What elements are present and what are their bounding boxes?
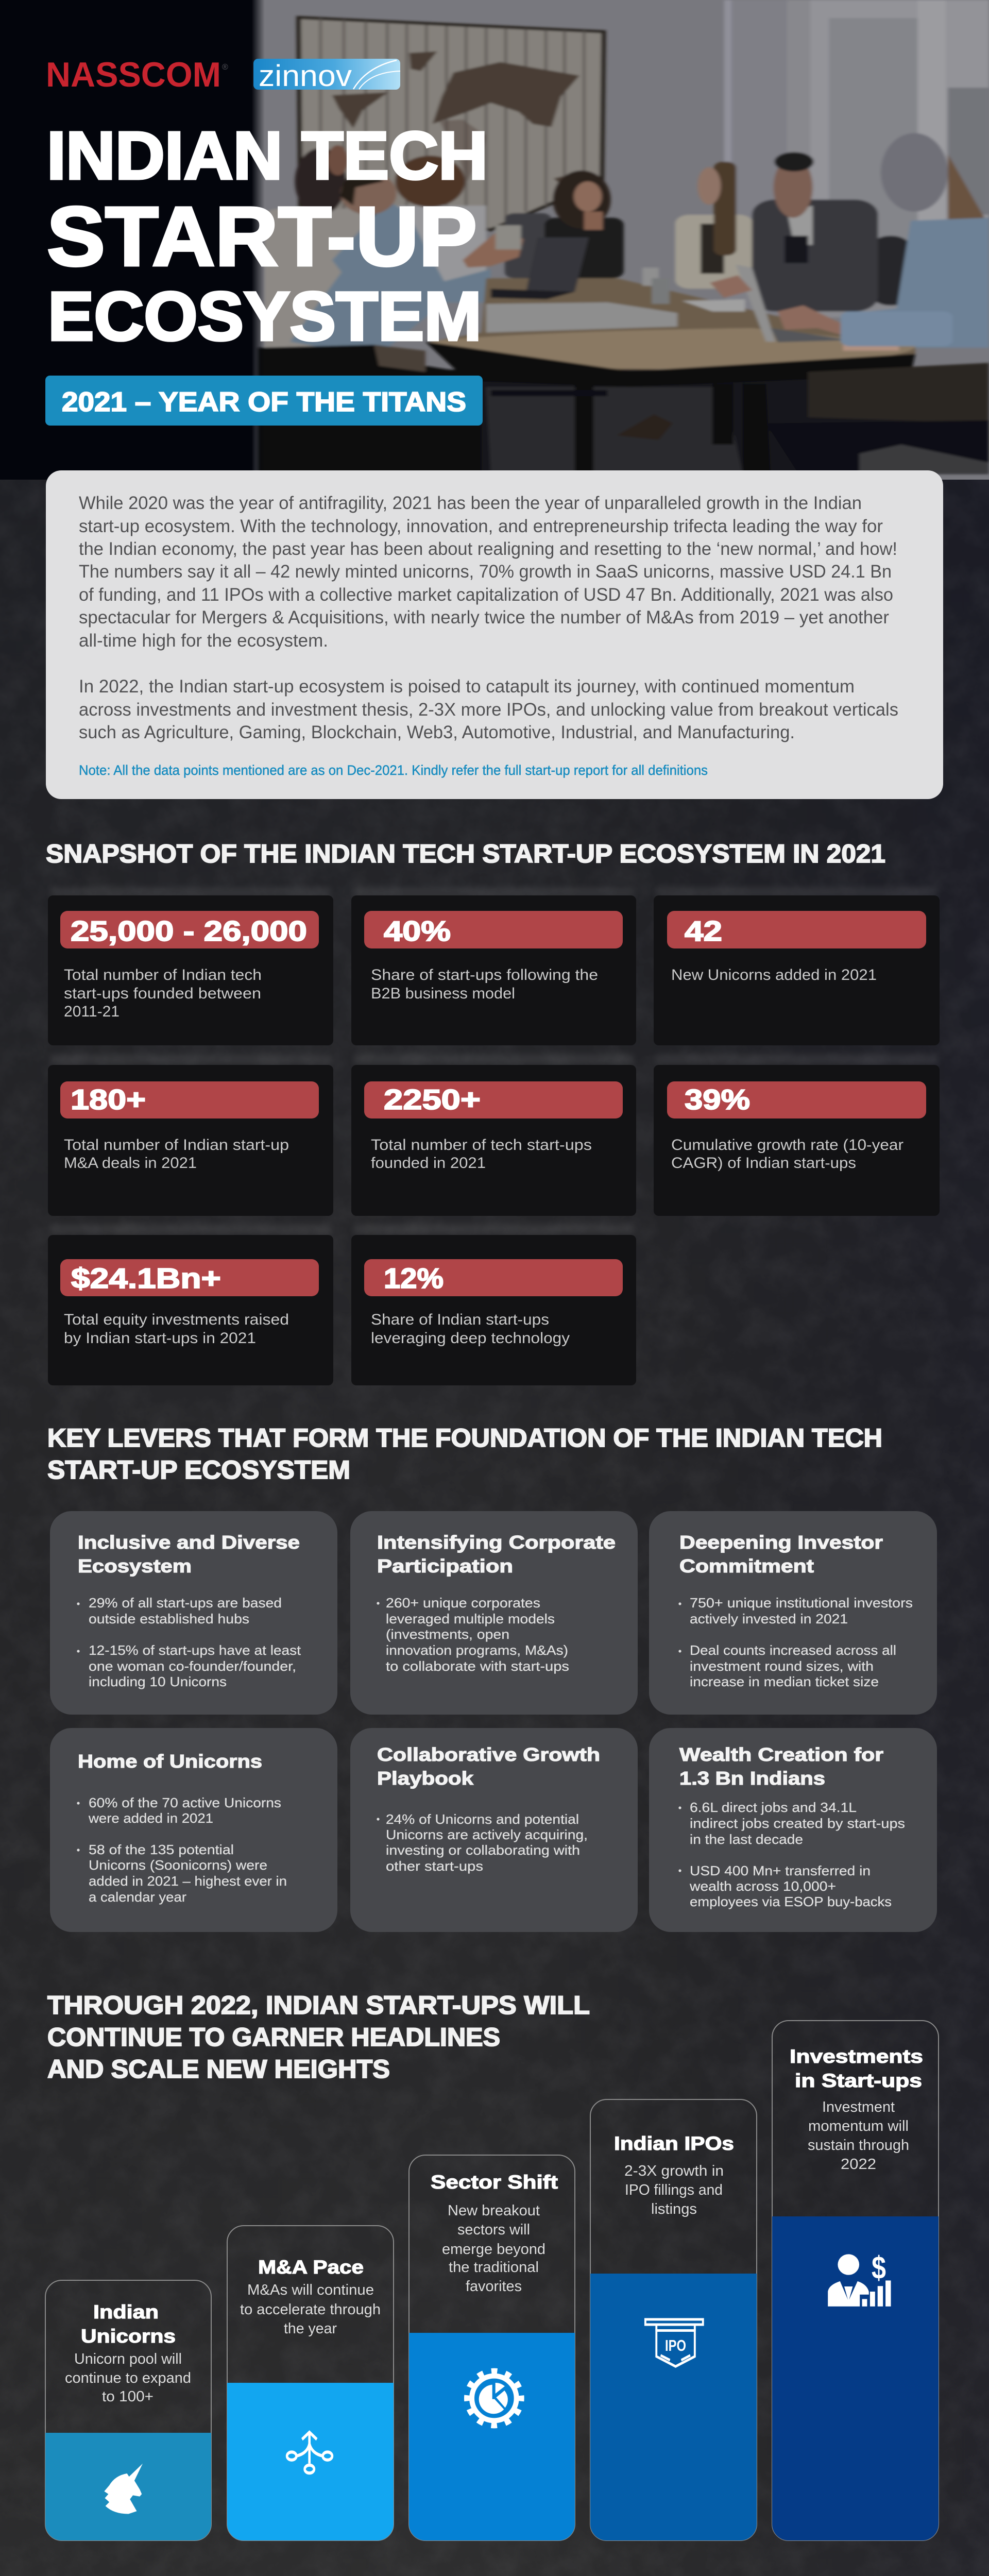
step text: emerge beyond [442,2241,545,2258]
lever bullets: Unicorns are actively acquiring, [386,1827,588,1842]
step text: favorites [466,2278,522,2295]
lever bullets: 12-15% of start-ups have at least [89,1642,301,1658]
step title: Indian IPOs [614,2133,734,2154]
lever bullets: wealth across 10,000+ [689,1878,836,1894]
lever bullets: 260+ unique corporates [386,1595,540,1611]
intro paragraph 1: spectacular for Mergers & Acquisitions, with nearly twice the number of M&As from 2019 – yet another [79,607,889,628]
lever card: Wealth Creation for 1.3 Bn Indians [649,1728,937,1932]
stat card: $24.1Bn+ [48,1235,333,1385]
step text: sectors will [457,2222,530,2238]
title: START-UP [47,189,477,283]
stat card: 12%: leveraging deep technology [371,1330,570,1347]
stat card: 25,000 - 26,000: Total number of Indian tech [64,967,262,984]
lever bullets: including 10 Unicorns [89,1674,227,1689]
heading: key levers: START-UP ECOSYSTEM [47,1455,350,1484]
lever title: Intensifying Corporate [377,1532,616,1553]
stat card: 2250+: founded in 2021 [371,1155,486,1172]
lever bullets [679,1800,905,1909]
heading: key levers [47,1423,882,1484]
icon: gear with pie chart [468,2371,521,2425]
hero photo: meeting room [0,0,989,480]
lever bullets [377,1595,569,1674]
step text: sustain through [808,2137,909,2154]
lever bullets: actively invested in 2021 [690,1611,848,1626]
lever bullets: Unicorns (Soonicorns) were [89,1857,267,1873]
step text: Investment [822,2099,895,2115]
step text: to accelerate through [240,2301,381,2318]
intro paragraph 1: all-time high for the ecosystem. [79,631,328,651]
stat card: $24.1Bn+: Total equity investments raised [64,1311,289,1328]
subtitle badge: 2021 – YEAR OF THE TITANS [62,387,466,417]
stat card: 25,000 - 26,000: start-ups founded between [64,985,261,1002]
step text [808,2099,909,2173]
title: ECOSYSTEM [48,278,482,355]
lever bullets: a calendar year [89,1889,186,1905]
lever bullets [377,1811,588,1874]
lever bullets [77,1795,287,1905]
lever card: Deepening Investor Commitment [649,1511,937,1715]
step text: IPO fillings and [625,2182,723,2198]
stat card: 25,000 - 26,000: 2011-21 [64,1003,120,1020]
stat card: $24.1Bn+: $24.1Bn+ [71,1262,221,1294]
step text [624,2163,724,2217]
intro paragraph 1 [79,493,897,651]
lever bullets: 24% of Unicorns and potential [386,1811,579,1827]
lever title: Playbook [377,1768,474,1789]
lever title [377,1744,600,1789]
intro paragraph 1: The numbers say it all – 42 newly minted unicorns, 70% growth in SaaS unicorns, massive USD 24.1 Bn [79,562,892,582]
icon: investor with chart: $ [872,2250,886,2286]
step title: M&A Pace [258,2257,364,2278]
stat card: 25,000 - 26,000 [48,895,333,1045]
logo: NASSCOM: ® [222,63,228,72]
step text: momentum will [808,2118,909,2134]
intro paragraph 1: the Indian economy, the past year has been about realigning and resetting to the ‘new normal,’ and how! [79,539,897,559]
stat card: $24.1Bn+: by Indian start-ups in 2021 [64,1330,256,1347]
step text [442,2202,545,2295]
heading: through 2022: AND SCALE NEW HEIGHTS [47,2055,390,2083]
step text: M&As will continue [247,2282,374,2298]
step title: in Start-ups [795,2070,922,2091]
stat card: 25,000 - 26,000: 25,000 - 26,000 [71,915,307,947]
step title: Unicorns [81,2326,176,2347]
step text: listings [651,2201,697,2217]
lever bullets: employees via ESOP buy-backs [690,1894,892,1909]
lever bullets: innovation programs, M&As) [386,1642,568,1658]
lever bullets: investing or collaborating with [386,1842,580,1858]
logo: NASSCOM: NASSCOM [46,55,221,94]
note: Note: All the data points mentioned are as on Dec-2021. Kindly refer the full start-up report for all definitions [79,762,708,778]
lever bullets: increase in median ticket size [690,1674,879,1689]
heading: through 2022: CONTINUE TO GARNER HEADLINES [47,2023,500,2052]
lever title: Collaborative Growth [377,1744,600,1765]
lever title [679,1744,883,1789]
icon: IPO banner: IPO [665,2336,686,2354]
icon: IPO banner [645,2319,703,2366]
logo: zinnov [253,59,400,93]
step text: continue to expand [65,2370,191,2386]
lever title [377,1532,616,1577]
step title: Sector Shift [431,2172,558,2193]
panel: introduction [46,470,943,799]
step card: Sector Shift [409,2155,575,2540]
intro paragraph 2: across investments and investment thesis, 2-3X more IPOs, and unlocking value from breakout verticals [79,700,898,720]
lever title: Wealth Creation for [679,1744,883,1765]
stat card: 42: 42 [685,915,722,947]
lever title: Participation [377,1555,513,1577]
intro paragraph 1: While 2020 was the year of antifragility, 2021 has been the year of unparalleled growth in the Indian [79,493,862,513]
lever bullets: leveraged multiple models [386,1611,555,1626]
lever bullets: 6.6L direct jobs and 34.1L [690,1800,857,1815]
lever bullets: indirect jobs created by start-ups [690,1816,905,1831]
lever title: 1.3 Bn Indians [679,1768,825,1789]
lever bullets [77,1595,301,1689]
icon: branching arrows [287,2432,332,2473]
heading: key levers: KEY LEVERS THAT FORM THE FOUNDATION OF THE INDIAN TECH [47,1423,882,1452]
lever card: Collaborative Growth Playbook [350,1728,638,1932]
intro paragraph 2: In 2022, the Indian start-up ecosystem is poised to catapult its journey, with continued momentum [79,676,855,697]
lever bullets: added in 2021 – highest ever in [89,1873,287,1889]
step card: Indian IPOs [590,2099,757,2540]
lever bullets: in the last decade [690,1832,803,1847]
step text: the traditional [449,2259,539,2276]
stat card: 180+: M&A deals in 2021 [64,1155,197,1172]
intro paragraph 1: of funding, and 11 IPOs with a collective market capitalization of USD 47 Bn. Additionally, 2021 was also [79,585,893,605]
lever bullets: 58 of the 135 potential [89,1842,234,1857]
lever bullets: other start-ups [386,1858,483,1874]
lever title: Home of Unicorns [78,1751,262,1772]
step title [790,2046,923,2091]
step text: the year [284,2320,337,2337]
stat card: 180+: Total number of Indian start-up [64,1137,289,1154]
stat card: 2250+ [351,1065,636,1216]
lever bullets: USD 400 Mn+ transferred in [690,1863,871,1878]
heading: through 2022 [47,1991,590,2083]
stat card: 40% [351,895,636,1045]
icon: unicorn [104,2464,143,2514]
subtitle badge [45,376,483,426]
stat card: 40%: Share of start-ups following the [371,967,598,984]
intro paragraph 2 [79,676,898,742]
title: INDIAN TECH [47,117,488,193]
step text [65,2351,191,2405]
lever bullets: 750+ unique institutional investors [690,1595,913,1611]
lever bullets: 29% of all start-ups are based [89,1595,282,1611]
stat card: 40%: B2B business model [371,985,515,1002]
title [47,117,488,355]
lever title [78,1532,300,1577]
step text: to 100+ [102,2388,154,2405]
stat card: 39%: 39% [685,1083,750,1115]
stat card: 12%: Share of Indian start-ups [371,1311,549,1328]
heading: through 2022: THROUGH 2022, INDIAN START-UPS WILL [47,1991,590,2020]
step card: Indian Unicorns [45,2280,211,2540]
stat card: 180+: 180+ [71,1083,146,1115]
lever title: Ecosystem [78,1555,192,1577]
intro paragraph 2: such as Agriculture, Gaming, Blockchain, Web3, Automotive, Industrial, and Manufacturing. [79,722,795,742]
lever bullets: to collaborate with start-ups [386,1658,569,1674]
stat card: 39% [654,1065,940,1216]
logo: zinnov: zinnov [259,59,352,93]
lever bullets [679,1595,913,1689]
lever title [679,1532,883,1577]
stat card: 42: New Unicorns added in 2021 [671,967,877,984]
lever bullets: outside established hubs [89,1611,249,1626]
lever bullets: Deal counts increased across all [690,1642,896,1658]
lever bullets: one woman co-founder/founder, [89,1658,296,1674]
lever title: Deepening Investor [679,1532,883,1553]
stat card: 39%: CAGR) of Indian start-ups [671,1155,856,1172]
step text [240,2282,381,2337]
stat card: 40%: 40% [384,915,451,947]
intro paragraph 1: start-up ecosystem. With the technology, innovation, and entrepreneurship trifecta leading the way for [79,516,883,536]
step title: Indian [93,2301,159,2323]
step text: Unicorn pool will [74,2351,182,2367]
step title [81,2301,176,2347]
step card: M&A Pace [227,2226,394,2540]
lever bullets: were added in 2021 [88,1810,213,1826]
lever title: Commitment [679,1555,814,1577]
lever card: Home of Unicorns [50,1728,337,1932]
step text: New breakout [448,2202,540,2219]
stat card: 12% [351,1235,636,1385]
step text: 2-3X growth in [624,2163,724,2179]
lever bullets: 60% of the 70 active Unicorns [89,1795,281,1810]
lever card: Intensifying Corporate Participation [350,1511,638,1715]
stat card: 39%: Cumulative growth rate (10-year [671,1137,903,1154]
lever card: Inclusive and Diverse Ecosystem [50,1511,337,1715]
lever bullets: (investments, open [386,1626,509,1642]
step title: Investments [790,2046,923,2067]
stat card: 12%: 12% [384,1262,444,1294]
stat card: 2250+: Total number of tech start-ups [371,1137,592,1154]
lever title: Inclusive and Diverse [78,1532,300,1553]
heading: snapshot: SNAPSHOT OF THE INDIAN TECH START-UP ECOSYSTEM IN 2021 [46,839,885,868]
step card: Investments in Start-ups [772,2021,939,2540]
stat card: 2250+: 2250+ [384,1083,481,1115]
step text: 2022 [841,2156,876,2173]
stat card: 42 [654,895,940,1045]
icon: investor with chart [828,2250,891,2307]
lever bullets: investment round sizes, with [690,1658,874,1674]
stat card: 180+ [48,1065,333,1216]
